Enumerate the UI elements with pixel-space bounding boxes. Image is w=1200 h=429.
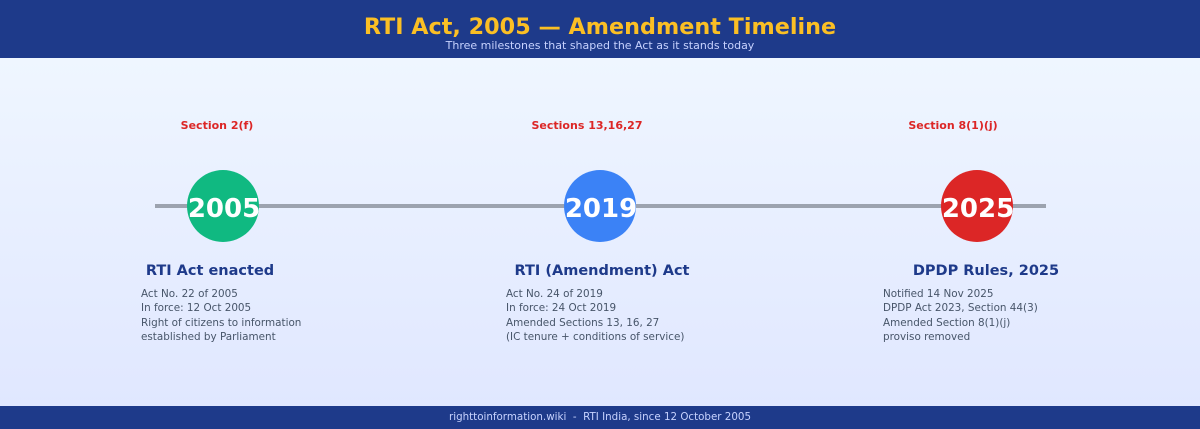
- milestone: 2005: [141, 119, 301, 343]
- milestone: 2005: Right of citizens to information: [141, 317, 301, 329]
- milestone: 2025: Section 8(1)(j): [908, 119, 998, 132]
- milestone: 2019: RTI (Amendment) Act: [515, 263, 690, 279]
- header: [0, 0, 1200, 58]
- milestone: 2019: 2019: [565, 194, 637, 224]
- milestone: 2025: DPDP Rules, 2025: [913, 263, 1059, 279]
- milestone: 2005: Act No. 22 of 2005: [141, 288, 238, 300]
- milestone: 2005: RTI Act enacted: [146, 263, 274, 279]
- milestone: 2005: established by Parliament: [141, 331, 276, 343]
- milestone: 2025: [883, 119, 1059, 343]
- milestone: 2019: [506, 119, 690, 343]
- milestone: 2005: 2005: [188, 194, 260, 224]
- footer: righttoinformation.wiki - RTI India, since 12 October 2005: [449, 411, 751, 423]
- milestone: 2019: Amended Sections 13, 16, 27: [506, 317, 659, 329]
- milestone: 2019: (IC tenure + conditions of service): [506, 331, 684, 343]
- milestone: 2005: Section 2(f): [181, 119, 253, 132]
- subtitle: Three milestones that shaped the Act as it stands today: [445, 39, 755, 52]
- timeline line: [155, 204, 1046, 208]
- milestone: 2025: 2025: [942, 194, 1014, 224]
- milestone: 2005: In force: 12 Oct 2005: [141, 302, 251, 314]
- title: RTI Act, 2005 — Amendment Timeline: [364, 14, 836, 40]
- milestone: 2025: Amended Section 8(1)(j): [883, 317, 1010, 329]
- milestone: 2019: Act No. 24 of 2019: [506, 288, 603, 300]
- milestone: 2019: Sections 13,16,27: [532, 119, 642, 132]
- milestone: 2025: proviso removed: [883, 331, 970, 343]
- milestone: 2025: DPDP Act 2023, Section 44(3): [883, 302, 1038, 314]
- milestone: 2019: In force: 24 Oct 2019: [506, 302, 616, 314]
- footer: [0, 406, 1200, 429]
- milestone: 2025: Notified 14 Nov 2025: [883, 288, 993, 300]
